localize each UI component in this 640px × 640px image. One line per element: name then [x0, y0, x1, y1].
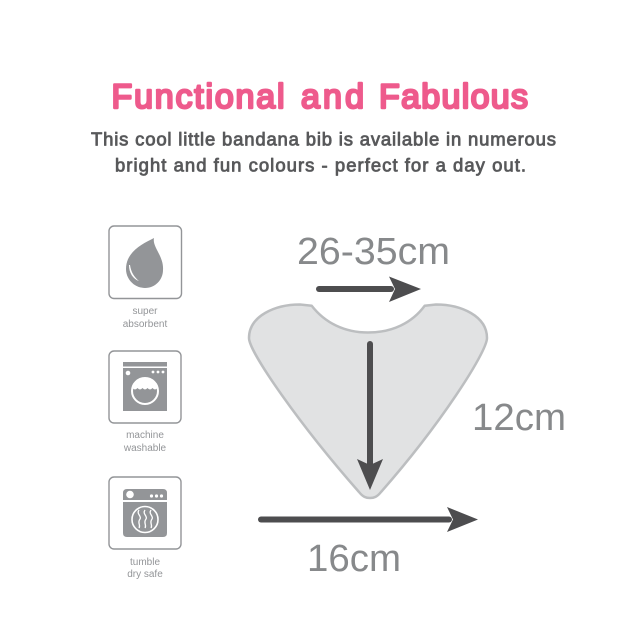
- length label: 12cm: [472, 397, 566, 439]
- icon: tumble dryer: [109, 477, 181, 549]
- arrow: neck width: [316, 276, 421, 302]
- caption: super absorbent: absorbent: [123, 319, 167, 330]
- caption: machine washable: machine: [126, 430, 164, 441]
- caption: tumble dry safe: dry safe: [127, 569, 163, 580]
- caption: super absorbent: [123, 306, 167, 330]
- caption: tumble dry safe: [127, 557, 163, 580]
- icon: washing machine: [109, 351, 181, 423]
- title: and: [301, 78, 364, 116]
- intro text: This cool little bandana bib is available in numerous: [91, 128, 556, 150]
- bib diagram: [249, 304, 487, 498]
- panel: machine washable: [109, 351, 181, 454]
- icon: water drop: [109, 226, 182, 298]
- panel: super absorbent: [109, 226, 182, 330]
- caption: machine washable: washable: [123, 443, 167, 454]
- caption: machine washable: [123, 430, 167, 454]
- intro text: bright and fun colours - perfect for a day out.: [115, 154, 526, 176]
- panel: tumble dry safe: [109, 477, 181, 580]
- title: [112, 78, 528, 116]
- intro text: [91, 128, 556, 176]
- caption: super absorbent: super: [132, 306, 158, 317]
- arrow: bib width: [258, 507, 478, 532]
- arrow: bib length: [357, 341, 383, 490]
- bottom width label: 16cm: [307, 538, 401, 580]
- title: Fabulous: [379, 78, 528, 116]
- title: Functional: [112, 78, 284, 116]
- width label: 26-35cm: [297, 231, 450, 273]
- caption: tumble dry safe: tumble: [130, 557, 160, 568]
